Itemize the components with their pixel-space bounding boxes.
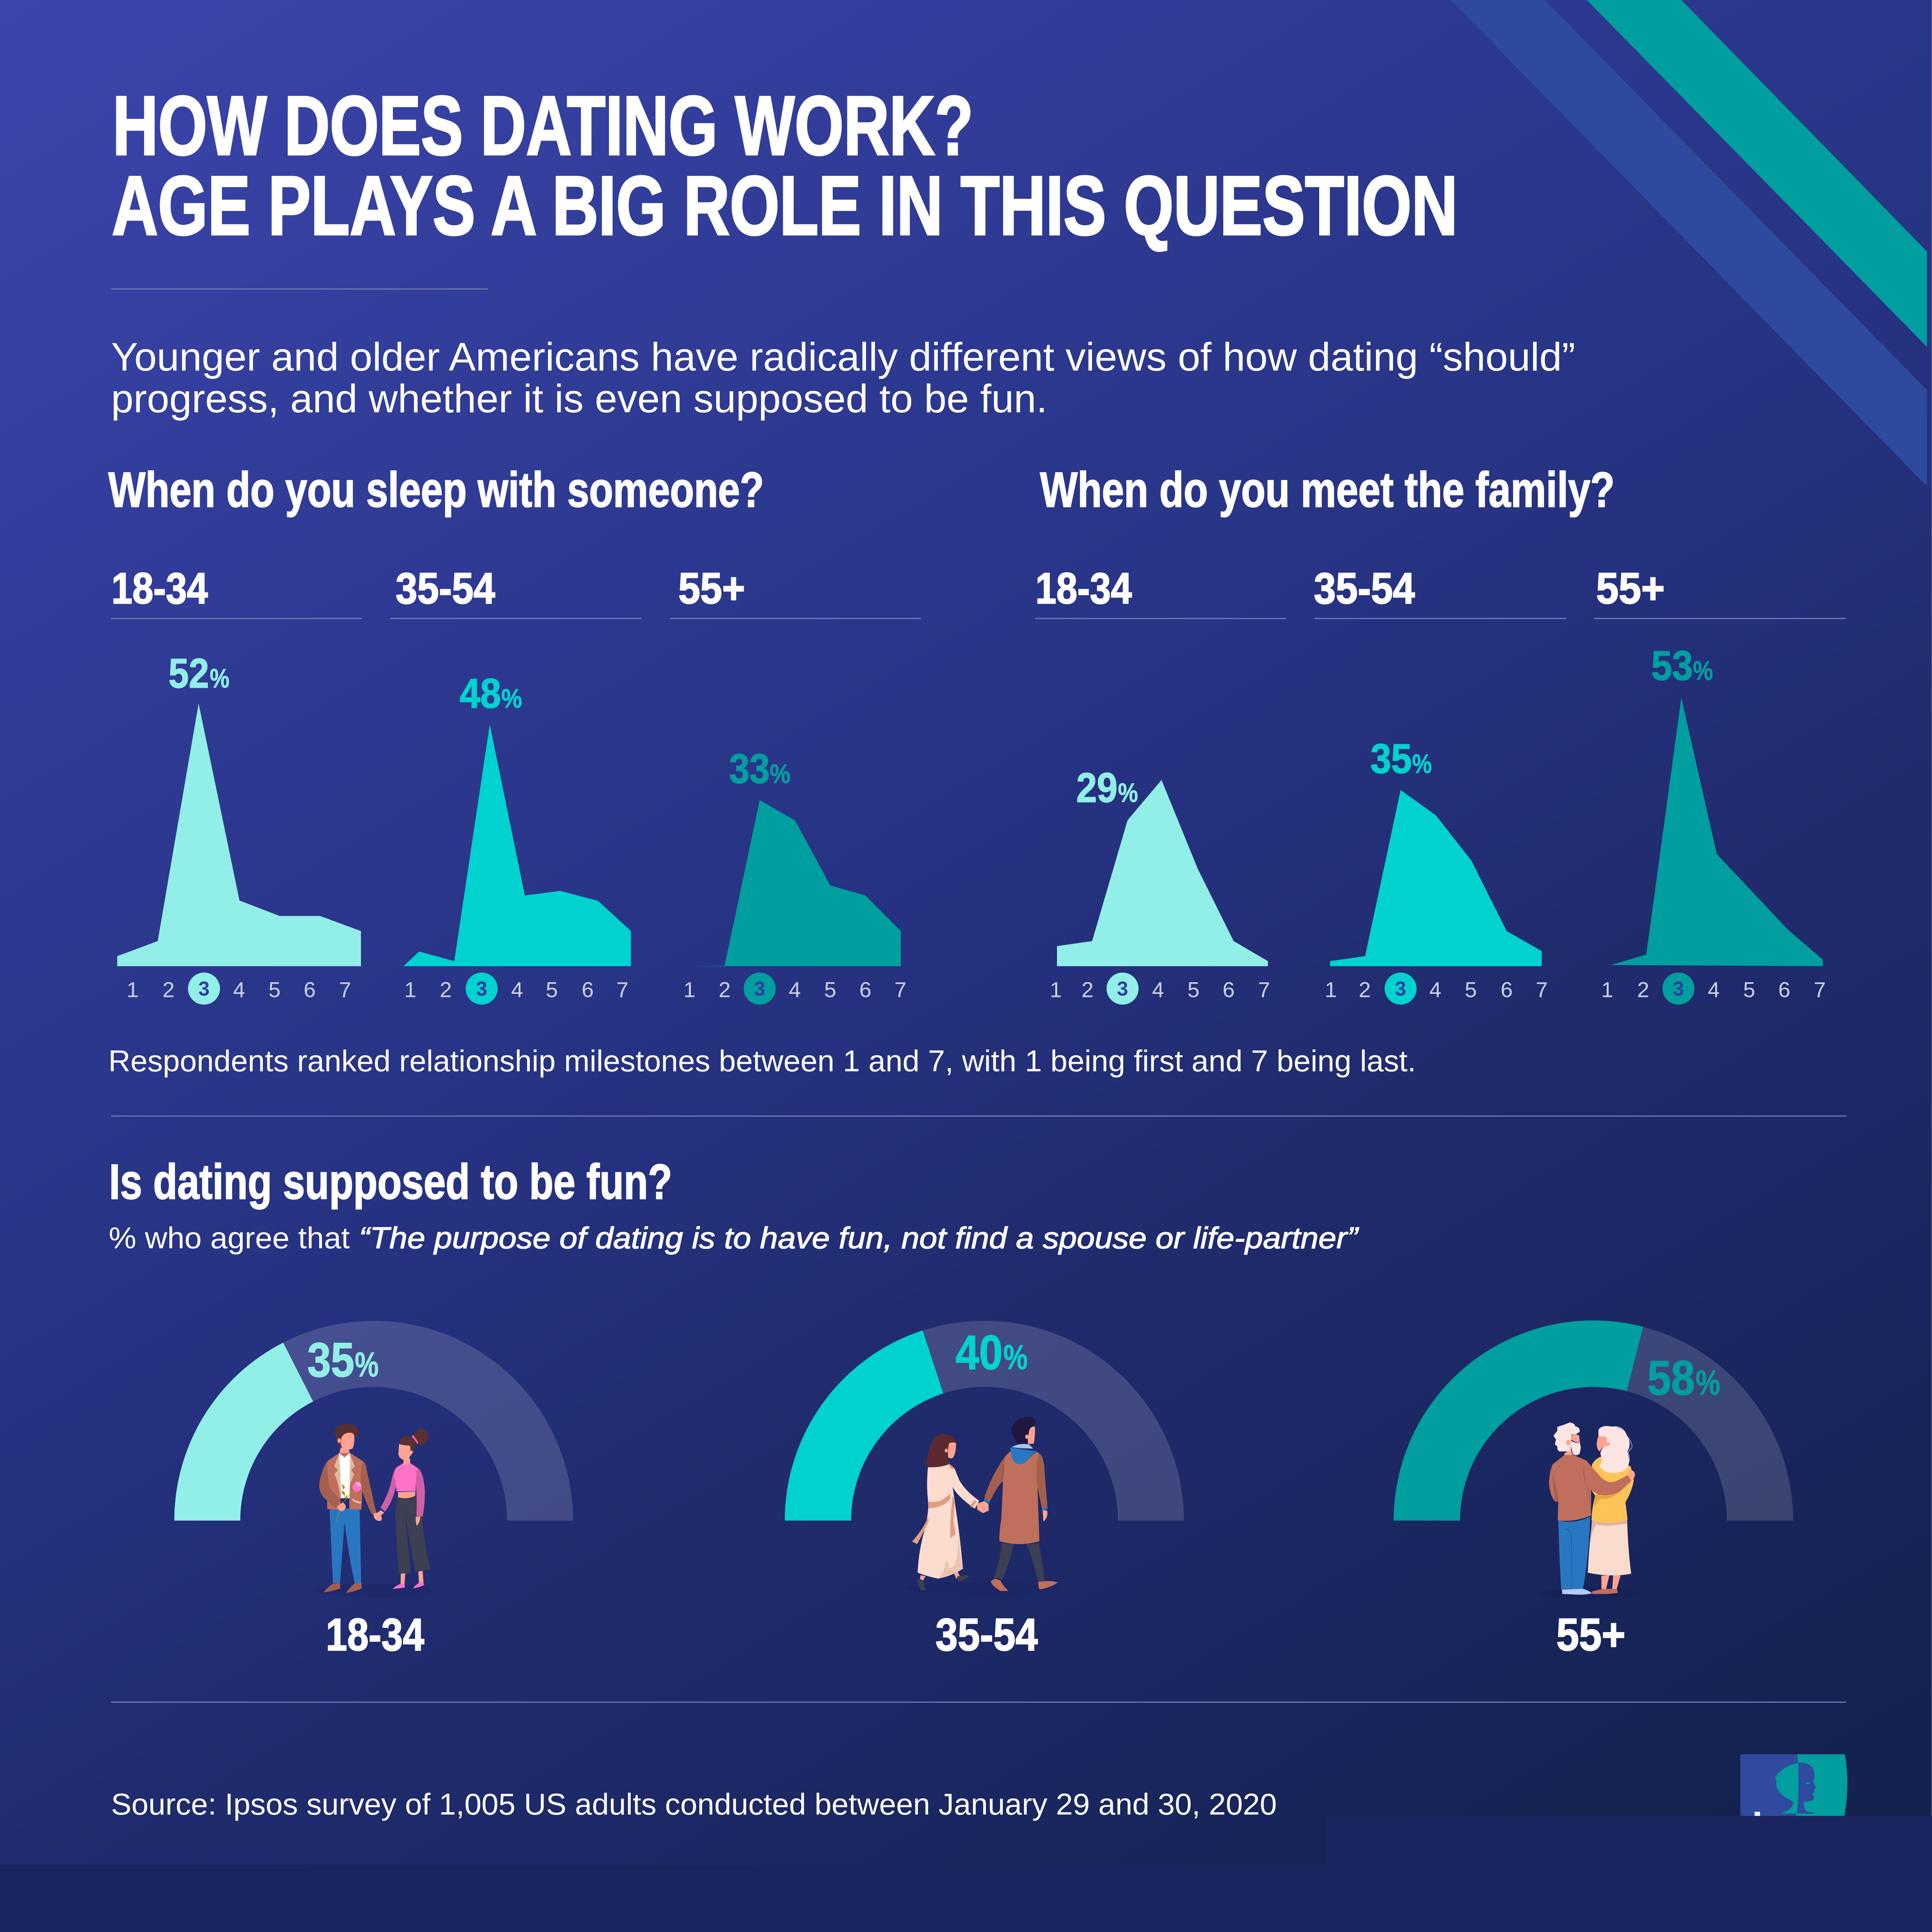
axis: 2 bbox=[440, 977, 452, 1002]
axis: 2 bbox=[719, 977, 731, 1002]
axis: 6 bbox=[1223, 977, 1235, 1002]
axis bbox=[1050, 973, 1270, 1005]
gauge label 35-54: 35-54 bbox=[935, 1609, 1038, 1660]
gauge fill 35% bbox=[174, 1343, 313, 1520]
heading: sleep: When do you sleep with someone? bbox=[108, 463, 764, 518]
axis: 5 bbox=[1743, 977, 1755, 1002]
gauge: 35-54 bbox=[785, 1321, 1184, 1660]
axis: 4 bbox=[511, 977, 523, 1002]
area bbox=[689, 800, 901, 966]
value 29%: 29 bbox=[1076, 764, 1117, 811]
logo: Ipsos bbox=[1740, 1754, 1847, 1851]
axis bbox=[404, 973, 628, 1005]
value 29%: % bbox=[1118, 778, 1138, 808]
value 35%: % bbox=[1412, 749, 1432, 779]
sub heading: % who agree that bbox=[109, 1221, 350, 1255]
axis: 1 bbox=[1325, 977, 1337, 1002]
value 52%: 52 bbox=[168, 650, 209, 697]
area bbox=[1057, 780, 1268, 966]
heading: fun: Is dating supposed to be fun? bbox=[109, 1154, 672, 1209]
axis: 6 bbox=[1778, 977, 1790, 1002]
axis: 3 bbox=[754, 978, 765, 1000]
axis: 2 bbox=[163, 977, 175, 1002]
age headers: sleep: 55+ bbox=[678, 564, 745, 613]
axis: 3 bbox=[199, 978, 209, 1000]
intro text: Younger and older Americans have radically different views of how dating “should” bbox=[111, 335, 1575, 379]
gauge value 35%: % bbox=[355, 1345, 379, 1384]
gauge track bbox=[1394, 1321, 1793, 1520]
gauge value 35%: 35 bbox=[307, 1333, 354, 1387]
gauge: 18-34 bbox=[174, 1321, 573, 1660]
axis: 4 bbox=[233, 977, 245, 1002]
axis: 4 bbox=[789, 977, 801, 1002]
title: AGE PLAYS A BIG ROLE IN THIS QUESTION bbox=[112, 159, 1458, 252]
axis: 3 bbox=[1117, 978, 1128, 1000]
axis: 5 bbox=[824, 977, 836, 1002]
gauge track bbox=[174, 1321, 573, 1520]
sub heading: “The purpose of dating is to have fun, not find a spouse or life-partner” bbox=[359, 1221, 1359, 1255]
axis: 4 bbox=[1152, 977, 1164, 1002]
gauge track bbox=[785, 1321, 1184, 1520]
axis: 7 bbox=[895, 977, 906, 1002]
axis bbox=[684, 973, 906, 1005]
value 33%: 33 bbox=[729, 745, 770, 792]
axis: 6 bbox=[304, 977, 316, 1002]
chart: family 55+ bbox=[1601, 642, 1826, 1005]
chart: sleep 55+ bbox=[684, 745, 906, 1005]
axis: 6 bbox=[859, 977, 871, 1002]
logo: Ipsos: Ipsos bbox=[1753, 1805, 1833, 1841]
axis: 4 bbox=[1708, 977, 1720, 1002]
axis: 4 bbox=[1429, 977, 1441, 1002]
gauge value 40%: % bbox=[1003, 1338, 1028, 1377]
gauge: 55+ bbox=[1394, 1320, 1793, 1660]
value 52%: % bbox=[210, 663, 230, 694]
heading: family: When do you meet the family? bbox=[1040, 463, 1615, 518]
age headers: sleep: 18-34 bbox=[111, 564, 208, 613]
chart: sleep 35-54 bbox=[403, 670, 631, 1005]
axis: 5 bbox=[1465, 977, 1477, 1002]
illustration: young couple bbox=[314, 1424, 432, 1597]
axis: 7 bbox=[1536, 977, 1548, 1002]
axis: 7 bbox=[1814, 977, 1826, 1002]
decorative corner stripes bbox=[1451, 0, 1927, 486]
axis: 1 bbox=[684, 977, 696, 1002]
axis: 6 bbox=[582, 977, 594, 1002]
chart: family 18-34 bbox=[1050, 764, 1270, 1005]
axis: 1 bbox=[127, 977, 139, 1002]
chart: sleep 18-34 bbox=[117, 650, 361, 1005]
axis: 2 bbox=[1359, 977, 1371, 1002]
axis: 7 bbox=[1258, 977, 1270, 1002]
axis: 5 bbox=[269, 977, 281, 1002]
gauge value 40%: 40 bbox=[956, 1326, 1003, 1379]
axis: 5 bbox=[1187, 977, 1199, 1002]
age headers: family bbox=[1035, 564, 1845, 619]
gauge value 58%: % bbox=[1696, 1364, 1720, 1402]
illustration: middle-aged couple bbox=[906, 1417, 1060, 1595]
age headers: sleep bbox=[111, 564, 921, 619]
axis: 1 bbox=[1601, 977, 1613, 1002]
gauge fill 58% bbox=[1394, 1320, 1643, 1520]
gauge fill 40% bbox=[785, 1330, 943, 1520]
axis bbox=[1601, 973, 1826, 1005]
axis: 6 bbox=[1501, 977, 1513, 1002]
age headers: family: 55+ bbox=[1596, 564, 1665, 613]
source: Source: Ipsos survey of 1,005 US adults conducted between January 29 and 30, 2020 bbox=[111, 1787, 1277, 1821]
axis: 7 bbox=[616, 977, 628, 1002]
age headers: family: 18-34 bbox=[1036, 564, 1132, 613]
gauge label 18-34: 18-34 bbox=[326, 1609, 424, 1660]
area bbox=[1611, 698, 1823, 966]
value 35%: 35 bbox=[1371, 735, 1412, 782]
title: HOW DOES DATING WORK? bbox=[112, 79, 973, 172]
axis: 2 bbox=[1637, 977, 1649, 1002]
age headers: family: 35-54 bbox=[1314, 564, 1415, 613]
title bbox=[112, 79, 1458, 252]
area bbox=[403, 724, 631, 966]
area bbox=[1330, 790, 1542, 966]
value 48%: 48 bbox=[460, 670, 501, 717]
axis: 3 bbox=[476, 978, 487, 1000]
axis bbox=[127, 973, 351, 1005]
intro text bbox=[111, 335, 1575, 421]
axis: 2 bbox=[1082, 977, 1094, 1002]
axis: 3 bbox=[1673, 978, 1684, 1000]
axis: 1 bbox=[1050, 977, 1062, 1002]
chart note: Respondents ranked relationship milestones between 1 and 7, with 1 being first and 7 being last. bbox=[108, 1044, 1416, 1078]
value 33%: % bbox=[770, 759, 791, 789]
gauge value 58%: 58 bbox=[1647, 1351, 1695, 1405]
value 53%: % bbox=[1693, 656, 1713, 686]
illustration: older couple bbox=[1541, 1422, 1641, 1599]
area bbox=[117, 704, 361, 966]
chart: family 35-54 bbox=[1325, 735, 1548, 1005]
age headers: sleep: 35-54 bbox=[396, 564, 495, 613]
intro text: progress, and whether it is even supposed to be fun. bbox=[111, 376, 1048, 421]
axis: 5 bbox=[546, 977, 558, 1002]
value 53%: 53 bbox=[1651, 642, 1693, 689]
value 48%: % bbox=[501, 684, 522, 714]
axis: 1 bbox=[404, 977, 416, 1002]
axis: 3 bbox=[1395, 978, 1406, 1000]
gauge label 55+: 55+ bbox=[1556, 1609, 1626, 1660]
axis bbox=[1325, 973, 1548, 1005]
axis: 7 bbox=[339, 977, 351, 1002]
